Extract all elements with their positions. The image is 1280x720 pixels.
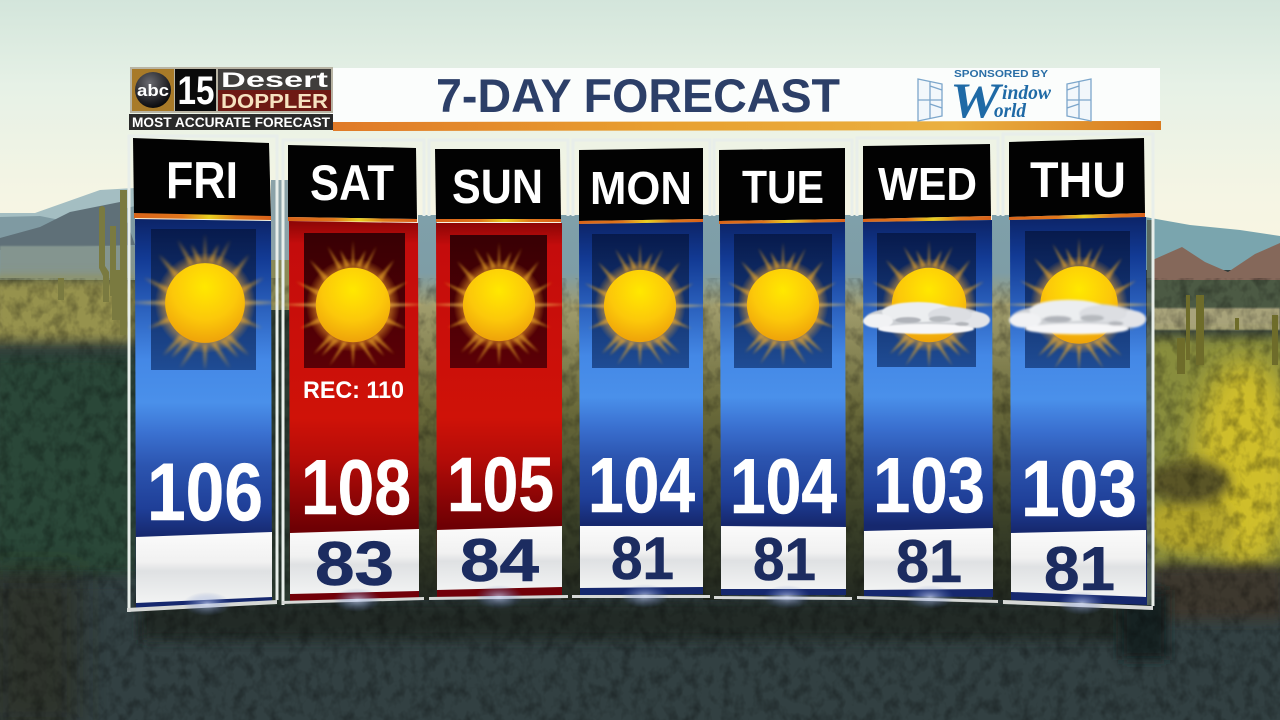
panel: SAT: 83: [315, 530, 394, 599]
panel: TUE: 81: [753, 526, 816, 593]
panel: SAT: [280, 145, 426, 612]
title: 7-DAY FORECAST: [436, 69, 840, 122]
logo: abc 15 Desert Doppler: Desert: [221, 69, 328, 92]
panel: MON: 104: [588, 441, 695, 529]
panel: MON: [570, 148, 710, 608]
sponsor: Window World: SPONSORED BY: [954, 68, 1048, 80]
panel: SUN: SUN: [452, 161, 543, 214]
panel: THU: THU: [1030, 152, 1126, 208]
gaps between panels: [271, 180, 1153, 605]
panel: FRI: 106: [147, 447, 263, 538]
panel: MON: 81: [611, 525, 674, 592]
panel: SAT: 108: [301, 443, 411, 531]
panel: THU: [1003, 138, 1154, 615]
panel: TUE: 104: [730, 442, 837, 530]
logo: abc 15 Desert Doppler: DOPPLER: [221, 91, 329, 113]
logo: abc 15 Desert Doppler: [129, 67, 333, 130]
scrub bands: [0, 278, 1280, 720]
panel: FRI: [127, 138, 283, 616]
icon: cloud: [1009, 300, 1146, 334]
panel: SUN: 84: [460, 527, 540, 594]
logo: abc 15 Desert Doppler: 15: [178, 69, 214, 113]
sponsor: Window World: [918, 68, 1091, 128]
panel: FRI: FRI: [166, 152, 238, 210]
panel: SUN: 105: [447, 442, 554, 528]
panel: SAT: REC: 110: [303, 377, 404, 404]
panel: TUE: TUE: [742, 161, 824, 213]
panel: WED: 81: [896, 528, 962, 595]
panel: TUE: [713, 148, 853, 609]
panel: THU: 81: [1044, 535, 1115, 604]
sponsor: Window World: indow: [1002, 82, 1052, 104]
header banner: [129, 67, 1161, 131]
panel: SAT: SAT: [310, 155, 394, 211]
logo: abc 15 Desert Doppler: abc: [137, 81, 169, 100]
distant mountains: [0, 188, 1280, 308]
panel: SUN: [429, 149, 569, 609]
icon: cloud: [863, 302, 990, 334]
panel: WED: [856, 144, 1002, 609]
panel: MON: MON: [590, 162, 692, 214]
panel: WED: 103: [873, 441, 985, 529]
panel: WED: WED: [878, 158, 977, 210]
panel frames: [129, 134, 1153, 612]
saguaro cacti: [58, 190, 1278, 374]
sponsor: Window World: W: [950, 72, 1004, 128]
logo: abc 15 Desert Doppler: MOST ACCURATE FORECAST: [132, 114, 330, 130]
panel: THU: 103: [1021, 444, 1137, 533]
sponsor: Window World: orld: [994, 100, 1027, 122]
